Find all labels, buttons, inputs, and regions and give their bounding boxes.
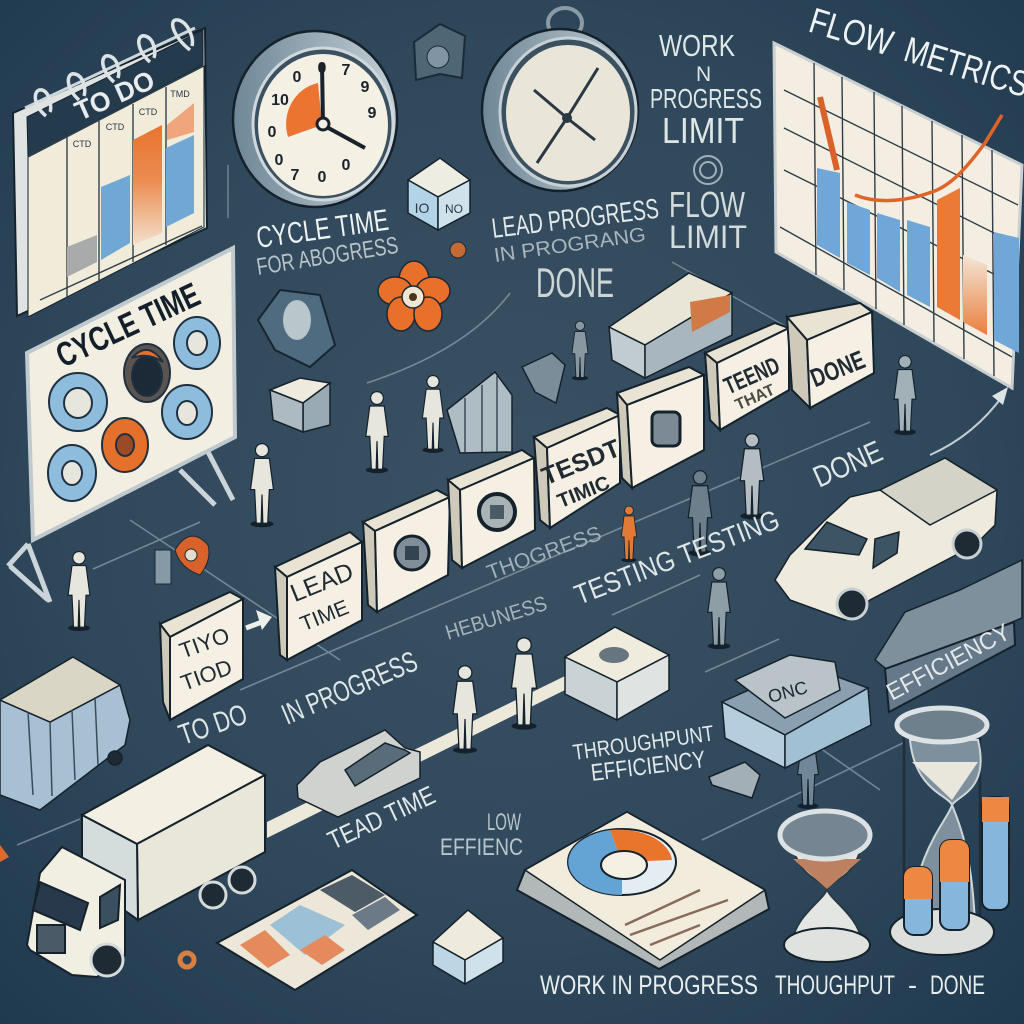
footer caption: DONE — [930, 970, 985, 1000]
desk item — [522, 353, 565, 403]
label: cycle time: FOR ABOGRESS — [255, 232, 400, 281]
trend line — [820, 97, 837, 170]
person — [572, 321, 588, 380]
bar: orange pale — [963, 255, 987, 335]
icon: small hourglass — [780, 811, 870, 962]
icon: small car — [297, 730, 420, 817]
column labels: CTD — [139, 107, 158, 117]
clock numerals: 10 — [271, 92, 289, 109]
clock numerals: 7 — [342, 62, 351, 79]
clock numerals: 0 — [318, 60, 327, 77]
icon: large truck — [27, 745, 265, 977]
icon: small item — [709, 762, 760, 798]
label: low efficiency: LOW — [487, 809, 521, 836]
column labels: CTD — [73, 139, 92, 149]
clock numerals: 9 — [368, 105, 377, 122]
label: flow limit: LIMIT — [669, 219, 747, 255]
tube — [940, 840, 969, 930]
bar — [847, 202, 870, 275]
person — [740, 434, 764, 519]
icon: machine with efficiency label: EFFICIENCY — [882, 619, 1015, 706]
clock numerals: 9 — [361, 79, 370, 96]
column labels — [73, 89, 190, 149]
footer caption — [540, 970, 985, 1000]
clock numerals: 0 — [342, 157, 351, 174]
small box — [270, 378, 330, 432]
heading: work in progress limit: LIMIT — [662, 110, 744, 151]
person — [708, 568, 730, 649]
bar: grey — [67, 235, 97, 277]
bar: orange — [937, 188, 960, 320]
label: lead progress: DONE — [536, 259, 614, 306]
icon: small bottom cube — [433, 910, 503, 984]
heading: work in progress limit: PROGRESS — [650, 83, 762, 114]
heading: work in progress limit: N — [696, 63, 711, 86]
icon: small cube — [408, 158, 470, 230]
step card: icon 1 — [363, 490, 450, 612]
labels: midfield: THOGRESS — [484, 522, 604, 585]
clock numerals: 0 — [318, 169, 327, 186]
clock numerals: 0 — [293, 69, 302, 86]
labels: midfield: TO DO — [175, 699, 251, 752]
icon: large hourglass — [890, 708, 1009, 955]
person — [422, 376, 444, 453]
label: cycle time — [254, 204, 400, 281]
bar: blue tall — [166, 135, 194, 227]
person — [511, 638, 537, 730]
step card: lead time: LEAD — [286, 557, 358, 608]
icon: cycle clock — [233, 31, 397, 207]
arrow: to done — [930, 387, 1008, 455]
label: lead progress: IN PROGRANG — [493, 224, 647, 267]
bar — [907, 220, 930, 307]
person — [688, 471, 712, 556]
labels: midfield: HEBUNESS — [443, 592, 550, 645]
person — [798, 732, 818, 809]
icon: white cube centre — [565, 627, 669, 720]
bar — [877, 213, 900, 292]
icon: orange marker — [0, 845, 9, 862]
person — [453, 666, 477, 753]
step card: lead time: TIME — [297, 596, 352, 636]
icon: platform with boxes: ONC — [766, 677, 810, 707]
person: orange — [621, 506, 637, 562]
tube — [982, 797, 1009, 910]
column labels: CTD — [106, 122, 125, 132]
person — [894, 356, 916, 435]
label: throughput efficiency: EFFICIENCY — [589, 746, 707, 787]
label: flow limit: FLOW — [669, 184, 745, 225]
label: flow limit — [669, 184, 747, 255]
step card: to do: TIYO — [176, 622, 233, 663]
step card: testing: TEEND — [720, 352, 784, 400]
label: throughput efficiency — [571, 720, 715, 787]
clock numerals: 0 — [275, 152, 284, 169]
label: lead progress — [490, 193, 660, 306]
binder rings — [25, 28, 195, 108]
panel: to do calendar — [13, 20, 207, 317]
clock numerals — [268, 60, 377, 186]
bar — [994, 232, 1019, 353]
bar: blue — [101, 175, 130, 260]
labels: midfield — [175, 435, 888, 752]
label: tead time: TEAD TIME — [323, 780, 440, 855]
step card: testing — [705, 323, 789, 430]
icon: report sheet — [217, 870, 417, 990]
label: lead progress: LEAD PROGRESS — [490, 193, 660, 244]
arrow: to lead time — [246, 610, 272, 630]
icon: delivery truck left — [0, 657, 130, 810]
bar — [817, 168, 840, 258]
step card: to do — [160, 592, 243, 720]
step card: to do: TIOD — [177, 654, 235, 696]
footer caption: WORK IN PROGRESS — [540, 970, 758, 1000]
clock numerals: 7 — [291, 167, 300, 184]
person — [68, 552, 90, 631]
icon: orange mini badge — [450, 242, 466, 258]
footer caption: THOUGHPUT — [775, 970, 895, 1000]
bar: orange — [133, 125, 162, 245]
panel: cycle time board — [8, 248, 235, 602]
labels: midfield: DONE — [808, 435, 888, 494]
panel: flow metrics chart — [774, 0, 1024, 388]
labels: midfield: IN PROGRESS — [277, 646, 422, 731]
icon: machine with efficiency label — [875, 560, 1022, 712]
icon: top emblem — [414, 24, 465, 80]
label: low efficiency — [440, 809, 523, 861]
step card: test time — [534, 408, 624, 528]
heading: flow metrics — [805, 0, 1024, 105]
label: low efficiency: EFFIENC — [440, 834, 523, 861]
icon: flower — [378, 261, 450, 331]
flow lane — [17, 165, 905, 845]
heading: cycle time: CYCLE TIME — [50, 276, 206, 375]
step card: test time: TESDT — [538, 434, 624, 491]
step card: done: DONE — [806, 344, 869, 393]
footer caption: - — [908, 970, 917, 1000]
dials — [48, 317, 220, 501]
icon: shield emblem — [258, 290, 335, 367]
step card: test time: TIMIC — [554, 472, 613, 513]
icon: orange ring — [180, 953, 194, 967]
heading: to do: TO DO — [70, 65, 159, 126]
step card: testing: THAT — [733, 382, 778, 414]
book stack — [447, 372, 512, 453]
heading: work in progress limit — [650, 28, 762, 151]
icon: compass — [482, 8, 638, 191]
step card: icon 2 — [448, 450, 535, 568]
clock numerals: 0 — [268, 124, 277, 141]
people figures — [68, 321, 916, 809]
icon: platform with boxes — [722, 655, 871, 768]
tube — [904, 867, 932, 935]
orange emblem small — [155, 536, 209, 584]
step card: done — [787, 303, 874, 408]
icon: small cube: IO — [415, 200, 429, 216]
label: cycle time: CYCLE TIME — [254, 204, 391, 255]
heading: work in progress limit: WORK — [659, 28, 735, 63]
box stack — [609, 273, 732, 378]
icon: small cube: NO — [445, 202, 463, 216]
bar: orange small — [167, 103, 194, 140]
heading: flow metrics: FLOW — [805, 0, 898, 64]
icon: flow emblem — [694, 156, 722, 184]
step card: lead time — [275, 532, 362, 660]
icon: pickup van right — [775, 458, 997, 620]
chart: pie on open book — [517, 812, 769, 969]
column labels: TMD — [170, 89, 190, 99]
person — [366, 392, 388, 473]
labels: midfield: TESTING TESTING — [570, 504, 784, 611]
step card: icon 3 — [617, 367, 704, 488]
person — [251, 444, 273, 527]
label: throughput efficiency: THROUGHPUNT — [571, 720, 715, 765]
